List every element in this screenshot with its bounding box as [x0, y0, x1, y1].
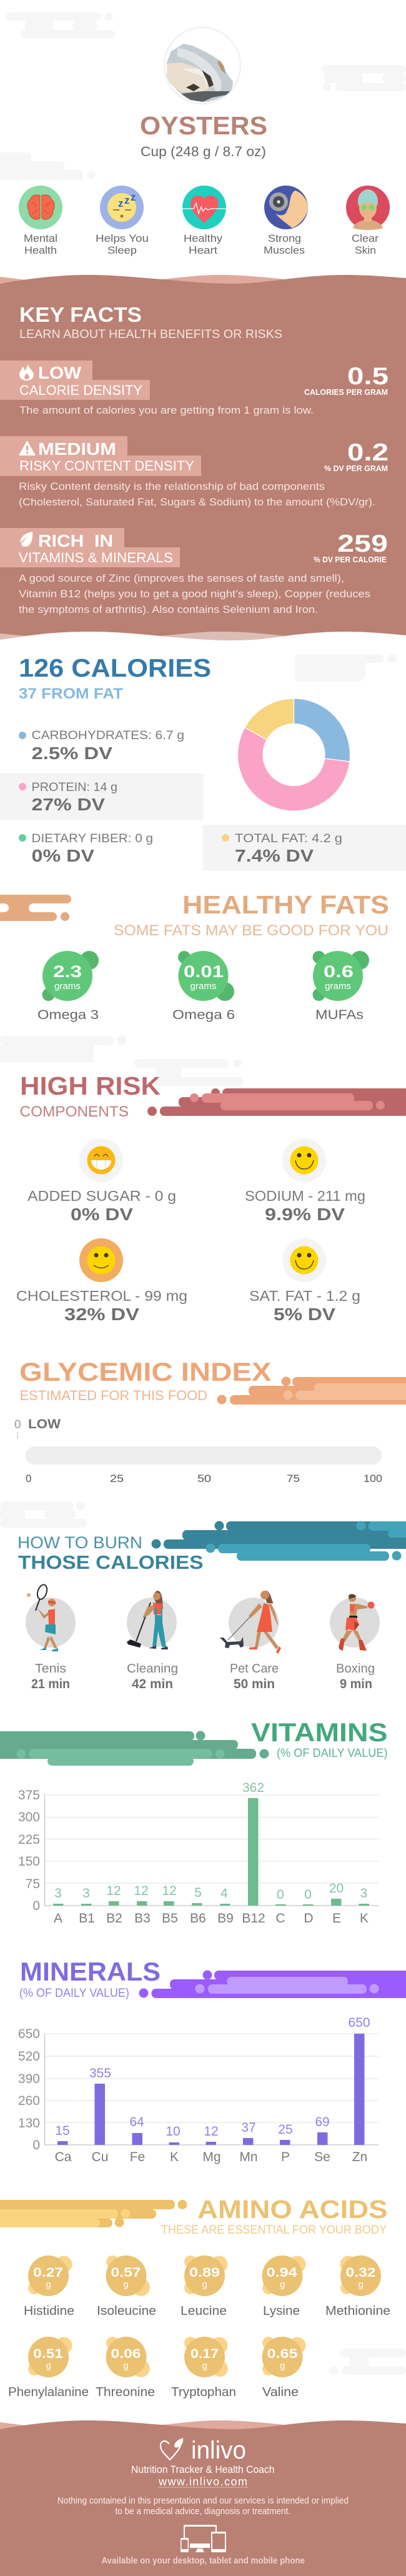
component: saturated fat	[249, 1238, 360, 1324]
bar chart: vitamins: 5	[194, 1886, 202, 1900]
decorative header bars	[217, 1377, 406, 1405]
availability note: Available on your desktop, tablet and mobile phone	[101, 2556, 305, 2566]
benefit labels: Skin	[355, 244, 376, 256]
amino: leucine: g	[202, 2279, 207, 2290]
subheading: SOME FATS MAY BE GOOD FOR YOU	[114, 922, 389, 939]
benefit labels	[24, 232, 379, 256]
component: cholesterol: 32% DV	[64, 1305, 139, 1324]
activity: pet care	[220, 1591, 281, 1691]
activity: boxing	[330, 1594, 380, 1691]
component: added sugar	[27, 1138, 176, 1224]
panel: burn calories: THOSE CALORIES	[18, 1551, 204, 1573]
bar chart: vitamins: B12	[242, 1911, 265, 1926]
amino: valine	[262, 2337, 306, 2399]
vitamins and minerals stat	[314, 530, 388, 564]
activity: boxing: 9 min	[340, 1677, 372, 1691]
panel: footer	[0, 2420, 406, 2576]
icon: brain	[19, 186, 62, 229]
gauge axis: 100	[364, 1473, 382, 1484]
amino: valine: g	[280, 2360, 285, 2371]
icon: warning	[19, 440, 36, 455]
legend: carbohydrates: 2.5% DV	[31, 743, 112, 763]
bar chart: vitamins: 12	[162, 1884, 177, 1898]
vitamins and minerals text	[19, 573, 370, 615]
bar chart: minerals: Mn	[239, 2150, 258, 2164]
bar chart: vitamins: 0	[32, 1899, 40, 1913]
amino: isoleucine	[97, 2255, 156, 2318]
panel: vitamins	[0, 1718, 387, 1926]
bar chart: minerals: Mg	[202, 2150, 221, 2164]
calorie density tag: CALORIE DENSITY	[19, 382, 142, 398]
vitamins and minerals tag: RICH IN	[38, 531, 113, 550]
website: www.inlivo.com	[158, 2475, 247, 2488]
calorie density stat: CALORIES PER GRAM	[304, 388, 388, 397]
heading: GLYCEMIC INDEX	[19, 1357, 271, 1386]
legend: total fat	[203, 825, 406, 871]
bar chart: vitamins: 375	[18, 1788, 40, 1803]
amino: lysine: Lysine	[263, 2304, 300, 2318]
risky content stat: 0.2	[347, 439, 389, 466]
icon: leaf	[21, 532, 32, 547]
disclaimer: to be a medical advice, diagnosis or treatment.	[115, 2507, 290, 2517]
component: saturated fat: 5% DV	[274, 1305, 335, 1324]
benefit labels: Heart	[189, 244, 217, 256]
bar chart: vitamins: 3	[360, 1886, 367, 1901]
icon: heart	[182, 186, 226, 229]
bar chart: minerals: Se	[314, 2150, 330, 2164]
icon: sleep: z	[124, 194, 130, 206]
gauge axis: 25	[110, 1473, 124, 1484]
bar chart: minerals: 64	[129, 2115, 144, 2129]
component: cholesterol	[16, 1238, 187, 1324]
legend: carbohydrates: CARBOHYDRATES: 6.7 g	[31, 729, 184, 742]
panel: healthy fats	[0, 890, 389, 1022]
bar chart: vitamins: 300	[18, 1810, 40, 1824]
bar chart: vitamins: D	[304, 1911, 314, 1926]
gauge marker: 0	[14, 1418, 21, 1431]
amino: histidine: 0.27	[33, 2265, 63, 2280]
amino: methionine: 0.32	[346, 2265, 376, 2280]
bar chart: vitamins: B9	[217, 1911, 234, 1926]
activity: pet care: 50 min	[234, 1677, 275, 1691]
benefit labels: Healthy	[184, 232, 223, 244]
icon: clear skin	[346, 186, 390, 230]
calorie density stat: 0.5	[347, 363, 389, 390]
benefit labels: Muscles	[264, 244, 305, 256]
bar chart: minerals: K	[170, 2150, 179, 2164]
bar chart: vitamins: 150	[18, 1854, 40, 1869]
bar chart: minerals: 15	[55, 2124, 70, 2138]
activity: tennis: Tenis	[35, 1662, 66, 1676]
panel: key facts	[0, 275, 406, 640]
stat: omega 3: 2.3	[53, 962, 82, 981]
bar chart: minerals: Zn	[352, 2150, 367, 2164]
amino: methionine: g	[359, 2279, 364, 2290]
disclaimer: Nothing contained in this presentation and our services is intended or implied	[57, 2496, 349, 2506]
benefit labels: Sleep	[107, 244, 137, 256]
bar chart: vitamins: 3	[82, 1886, 90, 1901]
bar chart: minerals: 390	[18, 2072, 40, 2086]
heading: HOW TO BURN	[17, 1533, 142, 1552]
bar chart: minerals: Fe	[130, 2150, 145, 2164]
component: saturated fat: SAT. FAT - 1.2 g	[249, 1288, 360, 1304]
heading: MINERALS	[20, 1957, 161, 1986]
stat: omega 6: grams	[190, 981, 216, 992]
stat: omega 6	[172, 951, 235, 1022]
amino: leucine	[181, 2255, 227, 2318]
vitamins and minerals text: Vitamin B12 (helps you to get a good night’s sleep), Copper (reduces	[19, 589, 370, 600]
benefit labels: Helps You	[96, 232, 149, 244]
bar chart: minerals: 69	[315, 2115, 330, 2129]
amino: threonine	[96, 2337, 155, 2399]
risky content stat	[324, 439, 389, 473]
bar chart: vitamins: 20	[329, 1881, 344, 1896]
panel: minerals	[18, 1957, 406, 2164]
activity: cleaning: 42 min	[132, 1677, 173, 1691]
panel: high risk	[16, 1072, 406, 1324]
legend: protein: PROTEIN: 14 g	[31, 781, 117, 794]
bar chart: minerals: 25	[278, 2122, 293, 2137]
bar chart: vitamins: 3	[54, 1886, 62, 1901]
bar chart: vitamins: C	[275, 1911, 285, 1926]
subheading: ESTIMATED FOR THIS FOOD	[20, 1388, 207, 1403]
amino: phenylalanine	[8, 2337, 89, 2399]
stat: mufas: grams	[325, 981, 351, 992]
bar chart: vitamins: 75	[26, 1877, 40, 1891]
gauge axis	[26, 1473, 382, 1484]
amino: isoleucine: g	[124, 2279, 129, 2290]
bar chart: vitamins: 225	[18, 1833, 40, 1847]
bar chart: vitamins: E	[332, 1911, 341, 1926]
bar chart: minerals: 37	[241, 2121, 256, 2135]
heading: HIGH RISK	[20, 1072, 161, 1100]
title: OYSTERS	[140, 111, 267, 140]
decorative header bars	[0, 2200, 187, 2227]
bar chart: vitamins: 0	[304, 1887, 312, 1902]
stat: omega 6: 0.01	[184, 962, 224, 981]
legend: carbohydrates	[19, 729, 184, 763]
bar chart: minerals: 355	[89, 2066, 111, 2081]
subheading: (% OF DAILY VALUE)	[277, 1747, 387, 1760]
amino: tryptophan	[171, 2337, 236, 2399]
legend: dietary fiber: DIETARY FIBER: 0 g	[31, 832, 153, 845]
bar chart: minerals: P	[281, 2150, 290, 2164]
amino: tryptophan: Tryptophan	[171, 2385, 236, 2399]
vitamins and minerals stat: 259	[337, 530, 388, 557]
bar chart: vitamins: 12	[134, 1884, 149, 1898]
stat: omega 6: Omega 6	[172, 1008, 235, 1022]
gauge track	[25, 1446, 382, 1465]
bar chart: vitamins: B1	[79, 1911, 95, 1926]
heading: AMINO ACIDS	[197, 2195, 387, 2224]
logo	[161, 2437, 246, 2464]
component: sodium	[245, 1138, 365, 1224]
activity: tennis: 21 min	[31, 1677, 70, 1691]
amino: tryptophan: g	[202, 2360, 207, 2371]
risky content stat: % DV PER GRAM	[324, 464, 388, 473]
panel: calories	[0, 654, 406, 871]
amino: tryptophan: 0.17	[191, 2347, 219, 2361]
logo: inlivo	[191, 2437, 246, 2464]
risky content text: Risky Content density is the relationship of bad components	[19, 481, 325, 492]
icon: sleep	[100, 186, 144, 229]
stat: mufas	[312, 951, 369, 1022]
benefit icons row	[19, 186, 390, 256]
benefit labels: Strong	[268, 232, 301, 244]
amino: leucine: Leucine	[181, 2304, 227, 2318]
amino: valine: 0.65	[267, 2347, 298, 2361]
risky content text	[19, 481, 375, 508]
amino: leucine: 0.89	[189, 2265, 220, 2280]
legend: dietary fiber: 0% DV	[31, 846, 94, 865]
amino: lysine	[262, 2255, 306, 2318]
bar chart: vitamins: 4	[220, 1886, 228, 1901]
decorative header bars	[151, 1521, 406, 1561]
gauge marker: LOW	[28, 1417, 61, 1431]
activity: pet care: Pet Care	[230, 1662, 279, 1676]
heading: KEY FACTS	[19, 303, 142, 326]
legend: total fat: TOTAL FAT: 4.2 g	[235, 832, 342, 845]
component: added sugar: ADDED SUGAR - 0 g	[27, 1188, 176, 1204]
activity: cleaning	[127, 1591, 178, 1691]
bar chart: minerals: 520	[18, 2049, 40, 2064]
heading: 126 CALORIES	[19, 654, 211, 682]
amino: threonine: 0.06	[111, 2347, 141, 2361]
bar chart: minerals: 260	[18, 2094, 40, 2108]
amino: histidine: Histidine	[24, 2304, 74, 2318]
risky content tag: MEDIUM	[38, 439, 116, 459]
subheading: 37 FROM FAT	[19, 685, 123, 702]
legend: total fat: 7.4% DV	[235, 846, 314, 865]
tagline: Nutrition Tracker & Health Coach	[131, 2464, 275, 2475]
decorative header bars	[0, 895, 71, 921]
calorie density tag: LOW	[38, 363, 81, 382]
amino: isoleucine: 0.57	[111, 2265, 141, 2280]
subheading: LEARN ABOUT HEALTH BENEFITS OR RISKS	[19, 328, 282, 341]
bar chart: vitamins: B2	[106, 1911, 122, 1926]
calorie density stat	[304, 363, 389, 397]
panel: burn calories	[17, 1521, 406, 1691]
risky content text: (Cholesterol, Saturated Fat, Sugars & Sodium) to the amount (%DV/gr).	[19, 497, 375, 508]
icon: flame	[19, 364, 34, 380]
vitamins and minerals text: the symptoms of arthritis). Also contains Selenium and Iron.	[19, 604, 318, 615]
gauge marker	[14, 1417, 61, 1439]
panel: amino acids	[0, 2195, 390, 2399]
heading: HEALTHY FATS	[182, 890, 389, 919]
bar chart: minerals: Ca	[55, 2150, 72, 2164]
activity: cleaning: Cleaning	[127, 1662, 178, 1676]
vitamins and minerals tag	[0, 528, 180, 567]
amino: phenylalanine: Phenylalanine	[8, 2385, 89, 2399]
component: sodium: 9.9% DV	[265, 1205, 345, 1224]
legend: protein: 27% DV	[31, 795, 105, 814]
bar chart: minerals: 12	[204, 2124, 219, 2139]
amino: histidine: g	[46, 2279, 51, 2290]
stat: omega 3: grams	[54, 981, 81, 992]
risky content tag: RISKY CONTENT DENSITY	[19, 458, 194, 474]
gauge axis: 50	[197, 1473, 211, 1484]
decorative header bars	[0, 1731, 269, 1766]
risky content tag	[0, 436, 201, 476]
bar chart: minerals	[18, 2016, 379, 2164]
bar chart: vitamins	[18, 1781, 379, 1926]
disclaimer	[57, 2496, 349, 2517]
amino: lysine: g	[280, 2279, 285, 2290]
stat: mufas: 0.6	[324, 962, 354, 981]
bar chart: minerals: 0	[32, 2138, 40, 2152]
amino: methionine	[325, 2255, 390, 2318]
bar chart: vitamins: K	[360, 1911, 369, 1926]
subheading: COMPONENTS	[20, 1103, 129, 1120]
panel: glycemic index	[14, 1357, 406, 1484]
bar chart: minerals: Cu	[92, 2150, 108, 2164]
bar chart: minerals: 130	[18, 2116, 40, 2131]
amino: phenylalanine: g	[46, 2360, 51, 2371]
bar chart: vitamins: 12	[106, 1884, 121, 1898]
bar chart: vitamins: B3	[134, 1911, 151, 1926]
amino: threonine: g	[124, 2360, 129, 2371]
amino: phenylalanine: 0.51	[33, 2347, 63, 2361]
heading: VITAMINS	[251, 1718, 387, 1747]
calorie density tag	[0, 361, 150, 400]
serving size: Cup (248 g / 8.7 oz)	[141, 144, 266, 159]
activity: tennis	[26, 1583, 76, 1691]
amino: lysine: 0.94	[266, 2265, 297, 2280]
gauge axis: 75	[287, 1473, 300, 1484]
amino: valine: Valine	[262, 2385, 299, 2399]
stat: omega 3	[37, 951, 99, 1022]
stat: mufas: MUFAs	[315, 1008, 364, 1022]
donut chart	[237, 699, 350, 811]
subheading: THESE ARE ESSENTIAL FOR YOUR BODY	[161, 2224, 387, 2237]
benefit labels: Clear	[352, 232, 379, 244]
component: cholesterol: CHOLESTEROL - 99 mg	[16, 1288, 187, 1304]
decorative header bars	[147, 1088, 406, 1116]
component: sodium: SODIUM - 211 mg	[245, 1188, 365, 1204]
bar chart: vitamins: B5	[162, 1911, 178, 1926]
amino: methionine: Methionine	[325, 2304, 390, 2318]
bar chart: minerals: 650	[348, 2016, 370, 2030]
legend: dietary fiber	[19, 832, 153, 865]
amino: threonine: Threonine	[96, 2385, 155, 2399]
legend: protein	[0, 773, 204, 820]
icon: muscle	[264, 186, 308, 229]
vitamins and minerals text: A good source of Zinc (improves the senses of taste and smell),	[19, 573, 344, 584]
icon: sleep: z	[118, 197, 124, 209]
vitamins and minerals tag: VITAMINS & MINERALS	[19, 550, 173, 565]
bar chart: minerals: 650	[18, 2027, 40, 2041]
vitamins and minerals stat: % DV PER CALORIE	[314, 555, 387, 564]
benefit labels: Health	[24, 244, 57, 256]
food image: oyster	[164, 27, 240, 104]
decorative header bars	[139, 1971, 406, 1998]
bar chart: vitamins: 0	[277, 1887, 284, 1902]
calorie density text: The amount of calories you are getting from 1 gram is low.	[19, 405, 314, 416]
gauge axis: 0	[26, 1473, 31, 1484]
stat: omega 3: Omega 3	[37, 1008, 99, 1022]
bar chart: vitamins: A	[54, 1911, 62, 1926]
subheading: (% OF DAILY VALUE)	[19, 1987, 129, 2000]
activity: boxing: Boxing	[336, 1662, 375, 1676]
benefit labels: Mental	[24, 232, 57, 244]
icon: devices	[181, 2525, 226, 2552]
amino: isoleucine: Isoleucine	[97, 2304, 156, 2318]
amino: histidine	[24, 2255, 74, 2318]
bar chart: minerals: 10	[166, 2124, 181, 2139]
bar chart: vitamins: B6	[190, 1911, 206, 1926]
bar chart: vitamins: 362	[242, 1781, 264, 1795]
icon: sleep: z	[131, 191, 136, 203]
component: added sugar: 0% DV	[71, 1205, 133, 1224]
